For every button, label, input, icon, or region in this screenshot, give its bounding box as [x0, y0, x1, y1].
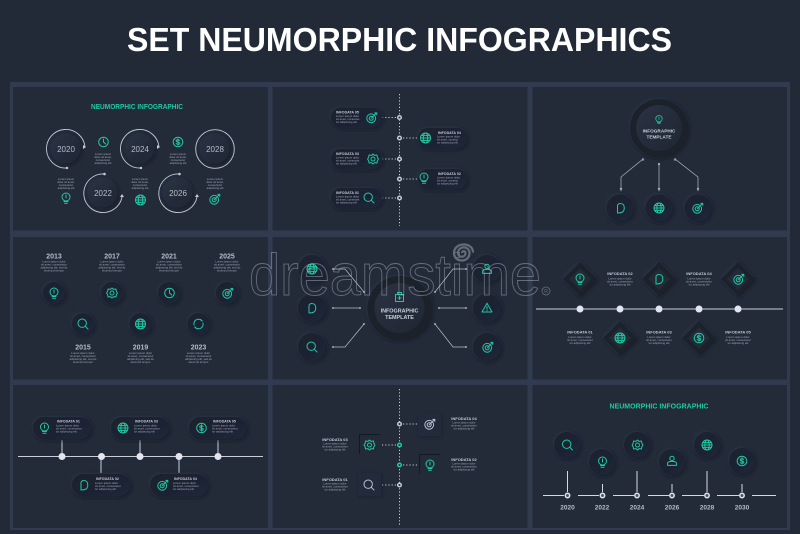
column 2024: 2024 [630, 504, 645, 512]
text INFODATA 03 [646, 330, 673, 345]
column 2015: 2015 [75, 344, 91, 352]
pill INFODATA 01: sit amet, consectet [336, 198, 360, 202]
column 2013: Lorem ipsum dolor [42, 260, 66, 264]
diamond: bulb [563, 262, 597, 296]
central circle: TEMPLATE [385, 315, 414, 321]
column 2017 [99, 254, 126, 304]
pill INFODATA 02: sit amet, consect [437, 178, 458, 182]
circle: document [606, 194, 634, 222]
axis line [536, 308, 783, 310]
column 2019 [127, 313, 154, 364]
column 2017: sit amet, consectetur [99, 262, 125, 266]
pill INFODATA 03: Lorem ipsum dolor [336, 156, 359, 160]
nodes [58, 453, 222, 460]
column 2017: 2017 [104, 254, 120, 260]
pill INFODATA 01: Lorem ipsum dolor [56, 424, 79, 428]
column 2023: Lorem ipsum dolor [187, 351, 210, 355]
text INFODATA 01 [322, 477, 349, 492]
column 2022: 2022 [595, 504, 610, 512]
heading: NEUMORPHIC INFOGRAPHIC [91, 104, 183, 111]
text block [94, 152, 112, 165]
text INFODATA 04: INFODATA 04 [451, 416, 478, 421]
dotted axis [398, 94, 400, 226]
pill INFODATA 03: INFODATA 03 [336, 152, 359, 156]
pill INFODATA 01: sit amet, consectetur [56, 426, 82, 430]
pill INFODATA 02: INFODATA 02 [96, 477, 119, 481]
pill INFODATA 05 [331, 108, 382, 128]
pill INFODATA 01 [331, 188, 382, 208]
text INFODATA 02: Lorem ipsum dolor [452, 462, 476, 466]
text INFODATA 02 [451, 457, 478, 472]
text INFODATA 02: INFODATA 02 [451, 457, 478, 462]
column 2028 [694, 432, 720, 512]
tile: gear [359, 434, 381, 455]
column 2021: adipiscing elit, sed do [156, 266, 183, 270]
pill INFODATA 01: INFODATA 01 [57, 420, 80, 424]
text block: Lorem ipsum [207, 177, 224, 181]
column 2025 [214, 254, 241, 304]
central circle [630, 99, 688, 157]
text block: consectetur [171, 158, 185, 162]
text block: consectetur [133, 183, 147, 187]
text INFODATA 02: sit amet, consectetur [607, 280, 633, 284]
year circle 2028 [196, 130, 234, 168]
heading: NEUMORPHIC INFOGRAPHIC [610, 402, 709, 410]
pill INFODATA 04: INFODATA 04 [438, 131, 461, 135]
text INFODATA 05: INFODATA 05 [725, 330, 752, 334]
pill INFODATA 01: tur adipiscing elit [56, 430, 77, 434]
column 2025: 2025 [219, 254, 235, 260]
column 2015: sit amet, consectetur [70, 354, 96, 358]
text block [57, 177, 75, 190]
text INFODATA 03: sit amet, consectetur [322, 444, 348, 448]
icon: dollar [173, 137, 183, 147]
column 2025: adipiscing elit, sed do [214, 266, 241, 270]
connectors [382, 118, 418, 198]
column 2017: Lorem ipsum dolor [100, 260, 124, 264]
pill INFODATA 02: sit amet, consectetur [95, 484, 121, 488]
text block: dolor sit amet, [57, 180, 75, 184]
column 2021 [156, 254, 183, 304]
text INFODATA 04 [451, 416, 478, 430]
panel: diamond timeline [532, 237, 787, 380]
diamond: target [721, 262, 755, 296]
text INFODATA 05: tur adipiscing elit [728, 341, 749, 345]
pill INFODATA 01: Lorem ipsum dolor [336, 194, 359, 198]
dotted axis [398, 389, 400, 525]
text INFODATA 04: sit amet, consectetur [451, 424, 477, 428]
column 2025: sit amet, consectetur [214, 262, 240, 266]
panel: hierarchy [532, 87, 787, 230]
text block: dolor sit amet, [169, 155, 187, 159]
circle: search [298, 333, 326, 361]
pill INFODATA 03 [331, 149, 382, 169]
text INFODATA 01: sit amet, consectetur [322, 484, 348, 488]
column 2015 [70, 313, 97, 364]
column 2020 [554, 432, 580, 512]
text block: Lorem ipsum [170, 152, 187, 156]
text INFODATA 05: sit amet, consectetur [725, 338, 751, 342]
text block: Lorem ipsum [58, 177, 75, 181]
text INFODATA 03: sit amet, consectetur [646, 338, 672, 342]
text INFODATA 02: sit amet, consectetur [451, 464, 477, 468]
text block: consectetur [59, 183, 73, 187]
text INFODATA 01: tur adipiscing elit [570, 341, 591, 345]
pill INFODATA 05: tur adipiscing elit [212, 430, 233, 434]
pill INFODATA 05: Lorem ipsum dolor [336, 114, 359, 118]
pill INFODATA 02: tur adipiscing elit [437, 182, 458, 186]
pill INFODATA 03: Lorem ipsum dolor [134, 424, 157, 428]
pill INFODATA 05: INFODATA 05 [336, 110, 359, 114]
tile: search [358, 473, 381, 496]
pill INFODATA 05: tur adipiscing elit [336, 120, 357, 124]
title: SET NEUMORPHIC INFOGRAPHICS [127, 21, 672, 58]
baseline and stems [543, 471, 776, 496]
panel: year grid [13, 237, 268, 380]
column 2019: sit amet, consectetur [128, 354, 153, 358]
circle: document [298, 294, 326, 322]
axis and stems [18, 440, 263, 473]
column 2023: sit amet, consectetur [186, 354, 211, 358]
arrows [620, 159, 699, 190]
year circle 2020: 2020 [57, 145, 75, 154]
diamond: globe [603, 321, 637, 355]
pill INFODATA 02 [418, 169, 467, 189]
year circle 2026 [159, 173, 199, 213]
column 2023: adipiscing elit, sed do [185, 357, 212, 361]
central circle [368, 276, 432, 340]
text INFODATA 02: tur adipiscing elit [454, 468, 475, 472]
year circle 2022: 2022 [94, 189, 112, 198]
text block [206, 177, 224, 190]
pill INFODATA 02: Lorem ipsum dolor [95, 481, 118, 485]
text block: dolor sit amet, [94, 155, 112, 159]
pill INFODATA 04: sit amet, consectetur [173, 484, 199, 488]
year circle 2024: 2024 [131, 145, 149, 154]
panel: square tiles timeline [272, 385, 528, 528]
text INFODATA 01: sit amet, consectetur [567, 338, 593, 342]
circle: target [473, 333, 501, 361]
pill INFODATA 04: INFODATA 04 [174, 477, 197, 481]
circle: target [684, 194, 712, 222]
pill INFODATA 03 [111, 417, 169, 439]
pill INFODATA 05: INFODATA 05 [213, 420, 236, 424]
central circle: INFOGRAPHIC [643, 128, 676, 134]
text INFODATA 01: INFODATA 01 [322, 477, 349, 482]
pill INFODATA 05: sit amet, consectet [336, 117, 360, 121]
text block [131, 177, 149, 190]
column 2017: adipiscing elit, sed do [99, 266, 126, 270]
text block: consectetur [96, 158, 110, 162]
tile: target [418, 413, 441, 436]
text INFODATA 04: INFODATA 04 [686, 271, 713, 276]
pill INFODATA 03: sit amet, consectet [336, 158, 360, 162]
circle: globe [646, 194, 672, 222]
column 2030: 2030 [735, 504, 750, 512]
pill INFODATA 01 [33, 417, 91, 439]
text INFODATA 02: tur adipiscing elit [610, 282, 631, 286]
column 2021: sit amet, consectetur [156, 262, 182, 266]
text INFODATA 03: Lorem ipsum dolor [323, 442, 347, 446]
text INFODATA 04: sit amet, consectetur [686, 280, 712, 284]
text INFODATA 03: INFODATA 03 [646, 330, 673, 334]
column 2026: 2026 [665, 504, 680, 512]
text block: adipiscing elit [132, 186, 149, 190]
pill INFODATA 03: tur adipiscing elit [336, 162, 357, 166]
pill INFODATA 01: tur adipiscing elit [336, 200, 357, 204]
text INFODATA 01: tur adipiscing elit [325, 488, 346, 492]
text INFODATA 04 [686, 271, 713, 286]
column 2013 [41, 254, 68, 304]
circle: person [473, 255, 501, 283]
central circle: INFOGRAPHIC [381, 308, 418, 314]
pill INFODATA 03: tur adipiscing elit [134, 430, 155, 434]
panel: vertical pill timeline [272, 87, 528, 230]
text INFODATA 01 [567, 330, 594, 345]
column 2015: Lorem ipsum dolor [71, 351, 95, 355]
column 2025: Lorem ipsum dolor [215, 260, 239, 264]
pill INFODATA 05 [189, 417, 247, 439]
text block: Lorem ipsum [132, 177, 149, 181]
column 2020: 2020 [560, 504, 575, 512]
text INFODATA 01: Lorem ipsum dolor [568, 335, 592, 339]
nodes [398, 422, 401, 487]
text block: dolor sit amet, [131, 180, 149, 184]
column 2021: eiusmod tempor [159, 268, 179, 272]
text INFODATA 03: Lorem ipsum dolor [647, 335, 671, 339]
icon: bulb [62, 193, 70, 203]
diamond: document [642, 262, 676, 296]
text INFODATA 04: Lorem ipsum dolor [452, 420, 476, 424]
watermark: dreamstime [249, 243, 541, 308]
column 2022 [589, 449, 615, 512]
icon: target [210, 194, 220, 204]
pill INFODATA 04: tur adipiscing elit [437, 140, 458, 144]
column 2026 [659, 449, 685, 512]
text INFODATA 01: Lorem ipsum dolor [323, 482, 347, 486]
text INFODATA 03 [322, 437, 349, 452]
year circle 2022 [84, 173, 124, 213]
column 2017: eiusmod tempor [102, 268, 122, 272]
text INFODATA 03: tur adipiscing elit [325, 448, 346, 452]
text block: adipiscing elit [170, 161, 187, 165]
pill INFODATA 04 [150, 474, 208, 496]
column 2025: eiusmod tempor [217, 268, 237, 272]
column 2013: 2013 [46, 254, 62, 260]
year circle 2024 [120, 129, 160, 169]
text block: consectetur [208, 183, 222, 187]
column 2013: sit amet, consectetur [41, 262, 67, 266]
column 2019: 2019 [133, 344, 148, 352]
text block: adipiscing elit [58, 186, 75, 190]
panel: horizontal pill timeline [13, 385, 268, 528]
column 2028: 2028 [700, 504, 715, 512]
column 2023: 2023 [191, 344, 206, 352]
tile: bulb [419, 454, 441, 475]
nodes [576, 306, 742, 312]
panel: stem timeline [532, 385, 787, 528]
column 2023 [185, 313, 212, 364]
column 2024 [624, 432, 650, 512]
pill INFODATA 05: Lorem ipsum dolor [212, 424, 235, 428]
text INFODATA 02: Lorem ipsum dolor [608, 276, 632, 280]
text block: dolor sit amet, [206, 180, 224, 184]
pill INFODATA 02: tur adipiscing elit [95, 487, 116, 491]
column 2023: eiusmod tempor [188, 360, 209, 364]
text block: Lorem ipsum [95, 152, 112, 156]
text block: adipiscing elit [207, 186, 224, 190]
icon: globe [136, 195, 146, 205]
pill INFODATA 01: INFODATA 01 [336, 191, 359, 195]
watermark: R [544, 289, 548, 295]
text block [169, 152, 187, 165]
column 2019: Lorem ipsum dolor [129, 351, 152, 355]
year circle 2020 [46, 129, 86, 169]
column 2013: adipiscing elit, sed do [41, 266, 68, 270]
pill INFODATA 05: sit amet, consectetur [212, 426, 238, 430]
pill INFODATA 02: INFODATA 02 [438, 172, 461, 176]
pill INFODATA 02: Lorem ipsum dolor [437, 176, 460, 180]
text INFODATA 04: tur adipiscing elit [689, 282, 710, 286]
text INFODATA 05 [725, 330, 752, 345]
text INFODATA 03: tur adipiscing elit [649, 341, 670, 345]
text INFODATA 05: Lorem ipsum dolor [726, 335, 750, 339]
pill INFODATA 04 [418, 128, 467, 148]
text block: adipiscing elit [95, 161, 112, 165]
text INFODATA 01: INFODATA 01 [567, 330, 594, 334]
pill INFODATA 03: INFODATA 03 [135, 420, 158, 424]
pill INFODATA 04: Lorem ipsum dolor [173, 481, 196, 485]
text INFODATA 03: INFODATA 03 [322, 437, 349, 442]
panel: circular timeline [13, 87, 268, 230]
pill INFODATA 04: sit amet, consect [437, 138, 458, 142]
diamond: dollar [682, 321, 716, 355]
pill INFODATA 04: tur adipiscing elit [173, 487, 194, 491]
circle: warning [473, 294, 501, 322]
text INFODATA 02 [607, 271, 634, 286]
pill INFODATA 02 [72, 474, 130, 496]
year circle 2026: 2026 [169, 189, 187, 198]
year circle 2028: 2028 [206, 145, 224, 154]
connectors [382, 424, 417, 485]
column 2021: Lorem ipsum dolor [157, 260, 181, 264]
pill INFODATA 03: sit amet, consectetur [134, 426, 160, 430]
arrows [332, 268, 467, 348]
icon: clock [99, 137, 108, 147]
column 2015: eiusmod tempor [73, 360, 93, 364]
central circle: TEMPLATE [647, 134, 671, 140]
text INFODATA 04: Lorem ipsum dolor [687, 276, 711, 280]
column 2019: eiusmod tempor [130, 360, 151, 364]
panel: central hub [272, 237, 528, 380]
column 2030 [729, 448, 755, 512]
circle: globe [298, 255, 326, 283]
text INFODATA 02: INFODATA 02 [607, 271, 634, 276]
column 2019: adipiscing elit, sed do [127, 357, 154, 361]
column 2021: 2021 [161, 254, 177, 260]
text INFODATA 04: tur adipiscing elit [454, 426, 475, 430]
nodes [398, 116, 401, 200]
column 2015: adipiscing elit, sed do [70, 357, 97, 361]
column 2013: eiusmod tempor [44, 268, 64, 272]
pill INFODATA 04: Lorem ipsum dolor [437, 134, 460, 138]
